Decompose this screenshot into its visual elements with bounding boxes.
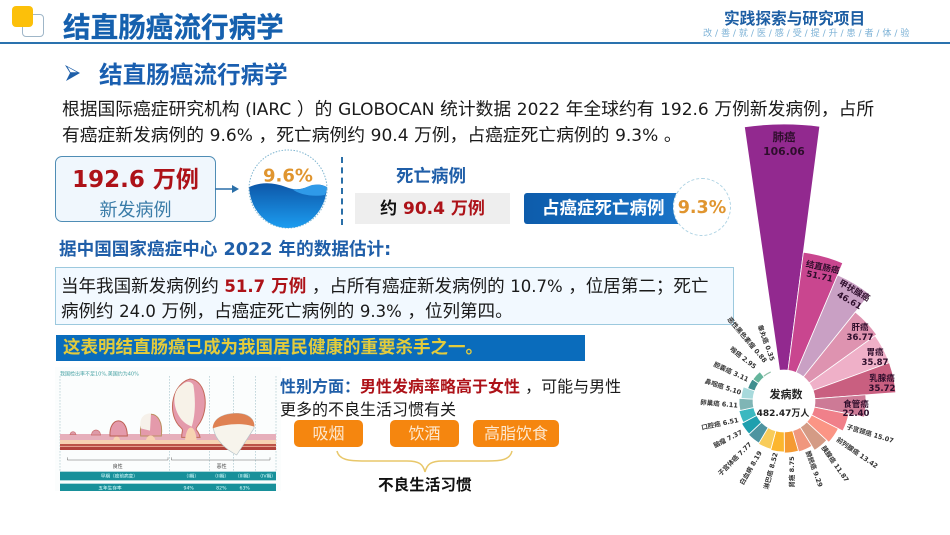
brace	[336, 450, 513, 472]
center label: 482.47万人	[757, 408, 809, 419]
arrow	[215, 185, 239, 193]
stage bars	[60, 472, 276, 492]
subheading: 据中国国家癌症中心 2022 年的数据估计:	[59, 240, 391, 260]
inner labels: 46.61	[835, 290, 863, 312]
deaths heading: 死亡病例	[396, 167, 466, 187]
outer labels: 脑瘤 7.37	[712, 427, 744, 450]
illustration: colorectal cancer progression	[60, 371, 276, 491]
China data text	[61, 276, 708, 322]
inner labels: 甲状腺癌	[837, 278, 872, 304]
intro text: 根据国际癌症研究机构 (IARC ）的 GLOBOCAN 统计数据 2022 年全球约有 192.6 万例新发病例，占所	[62, 100, 874, 120]
polyps	[70, 379, 254, 455]
outer labels: 肾癌 8.75	[787, 456, 796, 488]
icon: logo squares	[12, 6, 44, 37]
icon: arrow bullet	[65, 65, 80, 81]
center label	[757, 387, 809, 419]
inner labels: 食管癌	[843, 399, 869, 410]
inner labels: 36.77	[847, 333, 874, 343]
inner labels: 结直肠癌	[805, 259, 841, 277]
gender text: 性别方面：男性发病率略高于女性 ，可能与男性	[280, 377, 621, 396]
outer labels: 子宫体癌 7.77	[716, 440, 753, 477]
deaths value: 约 90.4 万例	[380, 199, 485, 219]
share of deaths bar: 占癌症死亡病例	[542, 199, 664, 219]
wedges	[739, 124, 897, 453]
icon: 9.6% water circle	[248, 150, 328, 228]
stage bars: （III期）	[235, 474, 253, 480]
stage bars: （I期）	[184, 474, 199, 480]
outer labels: 子宫颈癌 15.07	[845, 422, 895, 445]
illustration: colorectal cancer progression: 我国检出率不足10%,美国约为40%	[60, 371, 139, 378]
inner labels: 胃癌	[866, 347, 884, 358]
outer labels: 前列腺癌 13.42	[835, 435, 880, 470]
title: 结直肠癌流行病学	[63, 11, 284, 44]
tag: drinking: 饮酒	[408, 424, 440, 443]
divider	[341, 157, 343, 225]
banner	[56, 335, 585, 361]
inner labels	[763, 130, 896, 419]
share of deaths circle: 9.3%	[678, 198, 726, 218]
inner labels: 肝癌	[851, 322, 869, 333]
tag: high-fat diet: 高脂饮食	[484, 424, 548, 443]
tag: high-fat diet	[473, 420, 559, 447]
outer labels: 胰腺癌 11.87	[820, 444, 851, 484]
brace label: 不良生活习惯	[378, 476, 472, 494]
stage bars: （IV期）	[257, 474, 276, 480]
tag: smoking: 吸烟	[312, 424, 344, 443]
inner labels: 乳腺癌	[869, 373, 895, 384]
inner labels: 35.72	[869, 384, 896, 394]
banner: 这表明结直肠癌已成为我国居民健康的重要杀手之一。	[63, 338, 483, 358]
project slogan: 改 / 善 / 就 / 医 / 感 / 受 / 提 / 升 / 患 / 者 / 体 / 验	[703, 29, 909, 39]
tissue layers	[60, 434, 276, 450]
stat label: 新发病例	[100, 200, 172, 221]
stage bars: （II期）	[212, 474, 229, 480]
inner labels: 肺癌	[772, 130, 796, 144]
China data text: 病例约 24.0 万例，占癌症死亡病例的 9.3% ，位列第四。	[61, 302, 513, 322]
gender text: 更多的不良生活习惯有关	[280, 400, 456, 419]
stat value: 192.6 万例	[72, 167, 199, 193]
project name: 实践探索与研究项目	[724, 9, 865, 28]
icon: 9.6% water circle: 9.6%	[263, 166, 313, 186]
stat card: new cases	[55, 156, 216, 222]
inner labels: 35.87	[862, 358, 889, 368]
center label: 发病数	[770, 387, 802, 401]
share of deaths bar	[524, 193, 684, 224]
intro text	[62, 100, 874, 146]
section heading: 结直肠癌流行病学	[99, 61, 288, 89]
illustration: colorectal cancer progression: 良性	[113, 463, 123, 470]
stage bars: 早期（癌前病变）	[101, 473, 138, 480]
inner labels: 106.06	[763, 145, 805, 158]
header rule	[0, 42, 950, 44]
outer labels: 鼻咽癌 5.10	[704, 376, 743, 397]
outer labels: 膀胱癌 9.29	[804, 450, 825, 489]
inner labels: 51.71	[805, 269, 834, 285]
outer labels: 胆囊癌 3.11	[712, 359, 751, 384]
intro text: 有癌症新发病例的 9.6% ，死亡病例约 90.4 万例，占癌症死亡病例的 9.3% 。	[62, 126, 682, 146]
China data box	[55, 267, 734, 325]
illustration: colorectal cancer progression: 恶性	[217, 463, 227, 470]
outer labels: 白血病 8.19	[737, 449, 764, 486]
outer labels: 喉癌 2.95	[728, 344, 759, 371]
share of deaths circle	[673, 178, 731, 236]
tag: smoking	[294, 420, 363, 447]
deaths value	[355, 193, 510, 224]
outer labels: 恶性黑色素瘤 0.88	[726, 315, 770, 365]
stage brackets	[67, 457, 270, 460]
China data text: 当年我国新发病例约 51.7 万例 ，占所有癌症新发病例的 10.7% ，位居第二；死亡	[61, 277, 708, 297]
outer labels: 卵巢癌 6.11	[700, 397, 739, 410]
outer labels: 口腔癌 6.51	[700, 415, 740, 432]
outer labels: 淋巴癌 8.52	[761, 451, 780, 490]
outer labels: 睾丸癌 0.35	[756, 324, 777, 363]
outer labels	[700, 315, 895, 490]
tag: drinking	[390, 420, 459, 447]
inner labels: 22.40	[843, 409, 870, 419]
gender text	[280, 377, 621, 419]
